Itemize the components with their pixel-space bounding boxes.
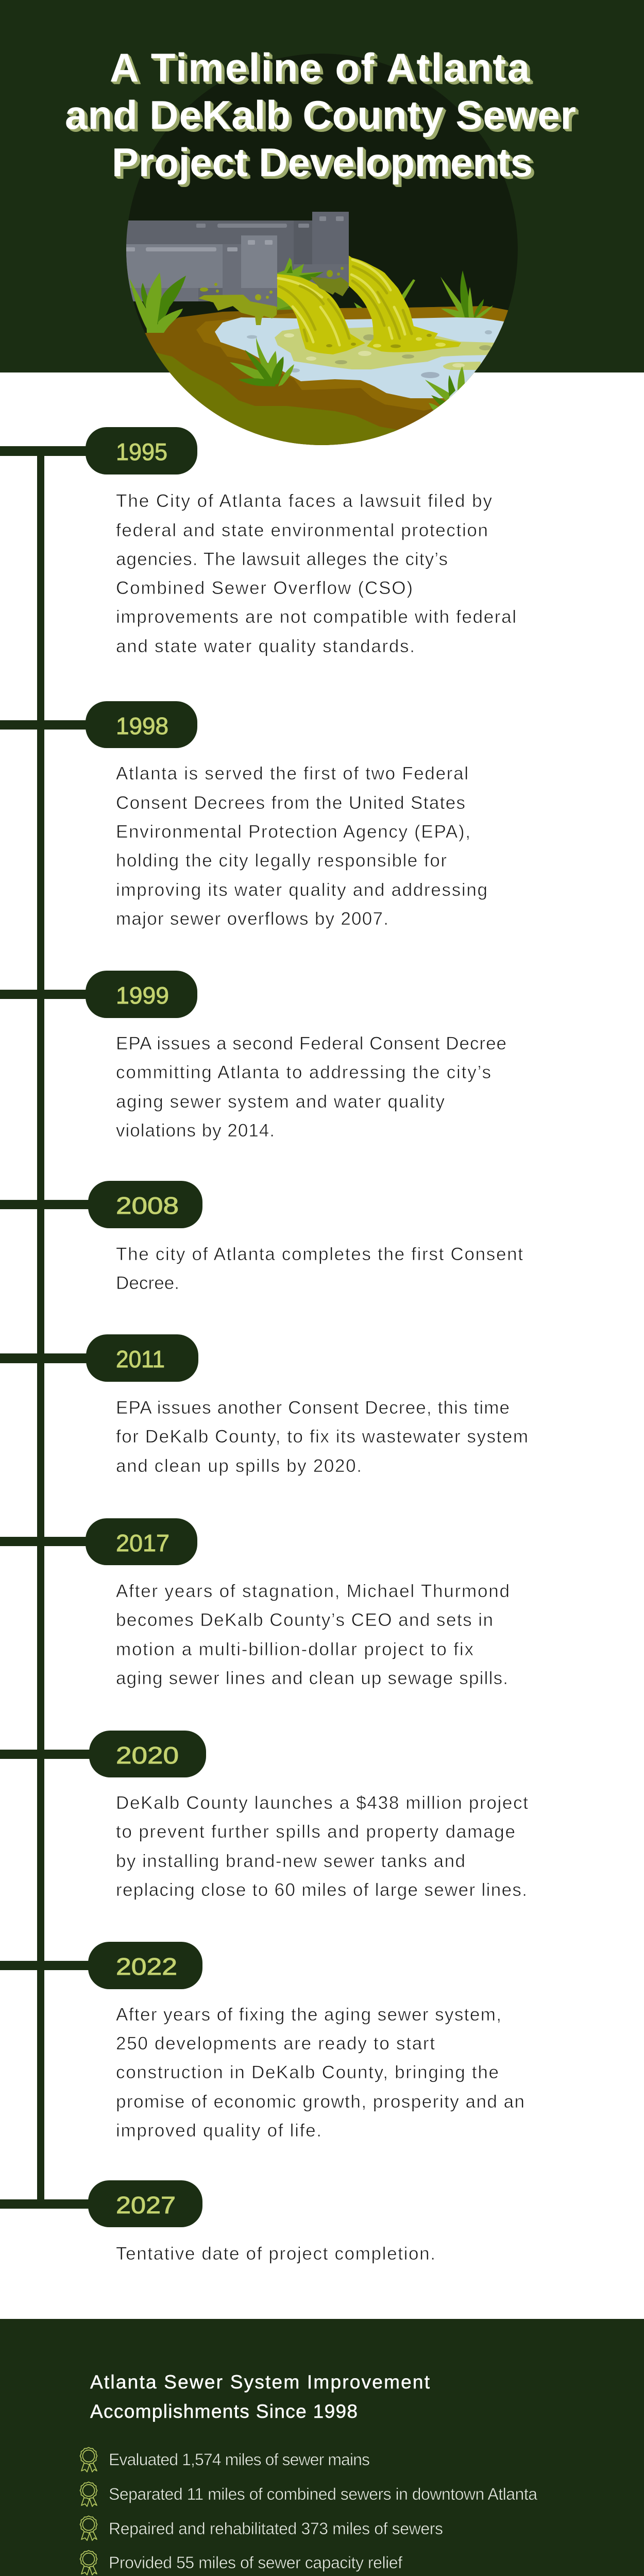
connector and year pill — [0, 1518, 197, 1565]
title: and DeKalb County Sewer — [65, 92, 576, 138]
text block: The city of Atlanta completes the first Consent — [116, 1244, 523, 1264]
list item: sewers repaired: Repaired and rehabilitated 373 miles of sewers — [109, 2519, 443, 2538]
text block: After years of stagnation, Michael Thurmond — [116, 1581, 510, 1601]
connector and year pill: 1995 — [116, 438, 167, 465]
timeline entry: 2008 — [0, 1181, 523, 1293]
text block: violations by 2014. — [116, 1121, 275, 1141]
connector and year pill: 2008 — [116, 1192, 179, 1219]
text block: agencies. The lawsuit alleges the city’s — [116, 549, 448, 569]
text block: to prevent further spills and property damage — [116, 1822, 515, 1842]
connector and year pill: 2017 — [116, 1530, 170, 1556]
back grass behind right stream — [354, 279, 415, 308]
connector and year pill: 2011 — [116, 1346, 165, 1372]
text block: construction in DeKalb County, bringing the — [116, 2062, 499, 2082]
panel heading — [90, 2371, 430, 2422]
connector and year pill: 2022 — [116, 1953, 177, 1980]
connector and year pill — [0, 971, 197, 1018]
grass: front clump — [230, 337, 294, 386]
text block: aging sewer lines and clean up sewage spills. — [116, 1668, 508, 1688]
connector and year pill: 1998 — [116, 713, 168, 739]
timeline entry: 2020 — [0, 1731, 528, 1900]
concrete wall and towers — [124, 212, 349, 307]
list item: miles evaluated: Evaluated 1,574 miles of sewer mains — [109, 2450, 370, 2469]
text block: improving its water quality and addressing — [116, 880, 487, 900]
text block — [116, 1793, 528, 1900]
timeline entry: 1998 — [0, 701, 487, 929]
creek bank: brown ground — [145, 306, 508, 445]
connector and year pill — [0, 701, 197, 748]
text block: Consent Decrees from the United States — [116, 793, 465, 813]
text block: committing Atlanta to addressing the city’s — [116, 1062, 491, 1082]
connector and year pill: 2027 — [116, 2192, 176, 2218]
text block — [116, 491, 516, 656]
text block: and state water quality standards. — [116, 636, 415, 656]
text block: major sewer overflows by 2007. — [116, 909, 388, 929]
title — [65, 45, 576, 185]
text block: EPA issues another Consent Decree, this time — [116, 1398, 510, 1418]
text block: and clean up spills by 2020. — [116, 1456, 362, 1476]
pale sludge on water — [275, 327, 515, 369]
header band — [0, 0, 644, 372]
panel heading: Accomplishments Since 1998 — [90, 2401, 358, 2422]
timeline entry: 1995 — [0, 427, 516, 656]
list item: combined sewers separated: Separated 11 miles of combined sewers in downtown Atlanta — [109, 2485, 537, 2503]
panel: accomplishments — [0, 2319, 644, 2576]
connector and year pill — [0, 2180, 202, 2227]
panel heading: Atlanta Sewer System Improvement — [90, 2371, 430, 2393]
grass: left clump — [129, 273, 186, 333]
text block: motion a multi-billion-dollar project to fix — [116, 1639, 474, 1659]
list item: capacity relief: Provided 55 miles of sewer capacity relief — [109, 2553, 402, 2572]
text block: Combined Sewer Overflow (CSO) — [116, 578, 413, 598]
title: Project Developments — [112, 140, 533, 185]
slime at left pipe — [198, 283, 277, 325]
text block — [116, 1398, 528, 1476]
text block: by installing brand-new sewer tanks and — [116, 1851, 465, 1871]
connector and year pill — [0, 1334, 198, 1382]
timeline entry: 2011 — [0, 1334, 528, 1476]
text block: holding the city legally responsible for — [116, 851, 447, 871]
grass: right clump on bank — [440, 270, 493, 318]
right stream of sludge — [349, 256, 461, 352]
timeline entry: 1999 — [0, 971, 506, 1141]
timeline entry: 2017 — [0, 1518, 510, 1688]
text block — [116, 764, 487, 929]
text block: EPA issues a second Federal Consent Decree — [116, 1033, 506, 1054]
text block: Tentative date of project completion. — [116, 2244, 435, 2264]
slime at right pipe — [310, 267, 349, 296]
connector and year pill: 1999 — [116, 982, 169, 1009]
illustration: sewer pipes overflowing into a creek — [121, 54, 520, 453]
text block — [116, 1244, 523, 1293]
back grass behind left stream — [277, 258, 324, 310]
text block: Atlanta is served the first of two Federal — [116, 764, 468, 784]
bottom olive ground — [156, 352, 398, 445]
title: A Timeline of Atlanta — [110, 45, 530, 90]
pale sludge patch, lower right — [443, 362, 481, 370]
text block: improvements are not compatible with federal — [116, 607, 516, 627]
water — [215, 317, 520, 398]
text block: replacing close to 60 miles of large sewer lines. — [116, 1880, 527, 1900]
list item: capacity relief — [80, 2550, 402, 2575]
timeline entry: 2027 — [0, 2180, 435, 2264]
timeline spine — [37, 451, 44, 2208]
text block: aging sewer system and water quality — [116, 1092, 445, 1112]
connector and year pill: 2020 — [116, 1742, 179, 1769]
list item: sewers repaired — [80, 2516, 443, 2540]
rocks and foam — [247, 330, 492, 378]
list item: miles evaluated — [80, 2447, 370, 2472]
connector and year pill — [0, 1942, 202, 1989]
text block: 250 developments are ready to start — [116, 2033, 435, 2054]
text block: promise of economic growth, prosperity and an — [116, 2092, 524, 2112]
text block: DeKalb County launches a $438 million project — [116, 1793, 528, 1813]
text block: The City of Atlanta faces a lawsuit filed by — [116, 491, 493, 511]
text block — [116, 1581, 510, 1688]
grass: lower right clump — [425, 366, 465, 411]
text block: After years of fixing the aging sewer system, — [116, 2005, 501, 2025]
text block: Environmental Protection Agency (EPA), — [116, 822, 470, 842]
connector and year pill — [0, 427, 197, 474]
connector and year pill — [0, 1181, 202, 1228]
timeline entry: 2022 — [0, 1942, 524, 2141]
text block: improved quality of life. — [116, 2121, 321, 2141]
text block: Decree. — [116, 1273, 179, 1293]
connector and year pill — [0, 1731, 206, 1777]
text block: federal and state environmental protection — [116, 520, 488, 540]
text block — [116, 2005, 524, 2141]
text block — [116, 1033, 506, 1141]
text block: for DeKalb County, to fix its wastewater system — [116, 1427, 528, 1447]
left stream of sludge — [277, 274, 365, 354]
text block: becomes DeKalb County’s CEO and sets in — [116, 1610, 493, 1630]
creek bank: lighter rim — [196, 306, 520, 412]
